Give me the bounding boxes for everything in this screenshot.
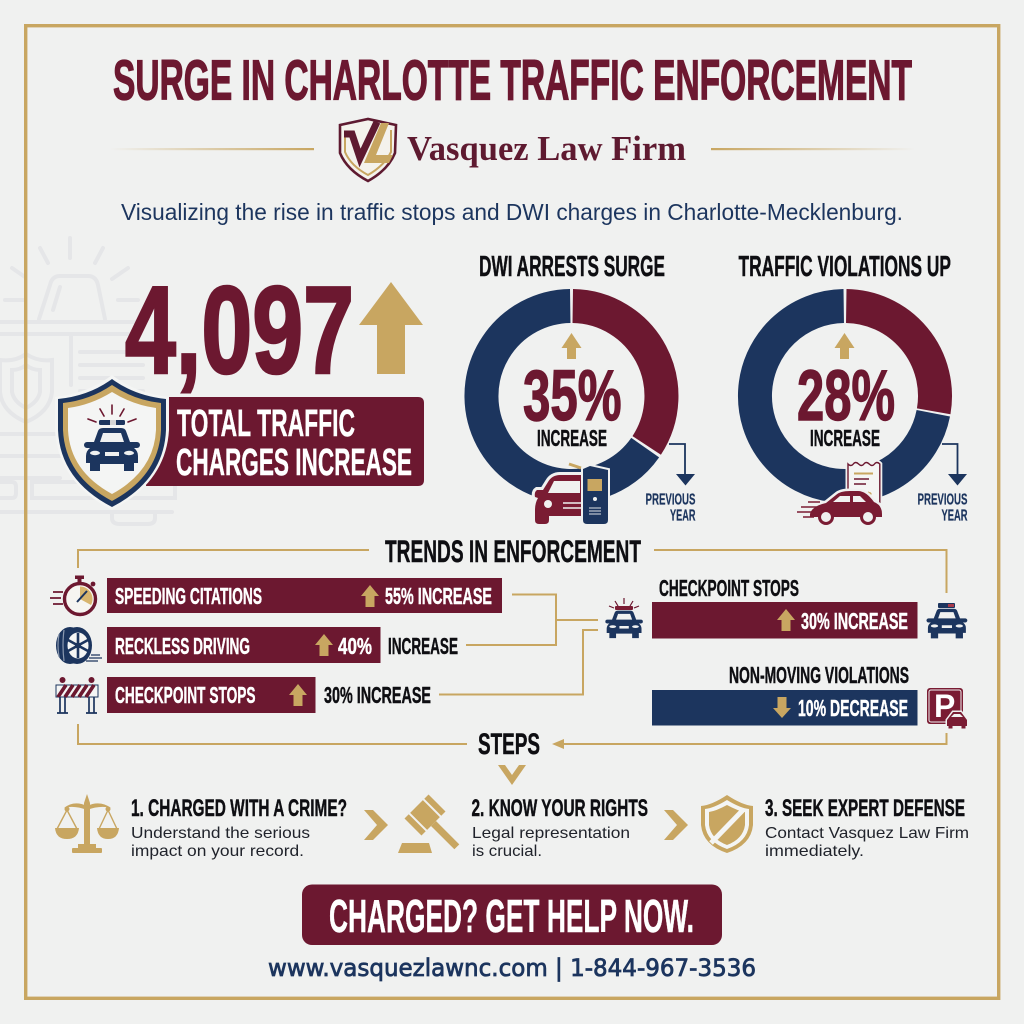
icon: tire xyxy=(56,627,102,664)
label: previous year: YEAR xyxy=(670,508,696,524)
label: previous year xyxy=(918,492,968,524)
connector lines xyxy=(78,550,946,744)
step heading: 1. CHARGED WITH A CRIME? xyxy=(131,795,347,822)
heading: DWI ARRESTS SURGE xyxy=(479,251,665,283)
donut chart xyxy=(755,306,935,486)
arrow: into steps xyxy=(552,739,564,749)
arrow: up xyxy=(359,282,423,374)
row: checkpoint stops right xyxy=(652,575,967,638)
step text xyxy=(472,825,630,860)
call to action button xyxy=(302,884,722,945)
row: non-moving violations xyxy=(652,662,967,728)
row: reckless driving xyxy=(56,627,458,664)
donut chart xyxy=(481,306,661,486)
icon: parking: P xyxy=(934,688,955,724)
icon: scales of justice xyxy=(55,794,119,853)
value: 40% xyxy=(338,633,372,659)
step text xyxy=(765,825,969,860)
label: previous year: PREVIOUS xyxy=(918,492,968,508)
arrow: down xyxy=(773,697,791,718)
label: previous year xyxy=(646,492,696,524)
icon: stopwatch xyxy=(50,576,96,614)
arrow: up xyxy=(361,585,379,607)
arrow: up xyxy=(289,684,307,706)
step 3 xyxy=(701,795,969,860)
panel: DWI arrests donut xyxy=(479,251,696,524)
icon: car and breathalyzer xyxy=(535,464,608,524)
icon: police car centre xyxy=(605,598,643,638)
value: 30% INCREASE xyxy=(324,682,431,708)
label: CHECKPOINT STOPS xyxy=(659,575,799,601)
arrow: steps chevron xyxy=(498,765,526,785)
row: checkpoint stops xyxy=(56,677,431,713)
step text: Contact Vasquez Law Firm xyxy=(765,825,969,842)
row: speeding citations xyxy=(50,576,502,614)
banner text: TOTAL TRAFFIC xyxy=(177,403,355,445)
label: previous year: PREVIOUS xyxy=(646,492,696,508)
icon: defense shield xyxy=(701,795,753,853)
subtitle: Visualizing the rise in traffic stops and DWI charges in Charlotte-Mecklenburg. xyxy=(121,199,903,225)
contact line: www.vasquezlawnc.com | 1-844-967-3536 xyxy=(268,954,756,982)
arrow: previous year xyxy=(669,444,695,486)
arrow: up xyxy=(562,333,582,359)
step text: impact on your record. xyxy=(131,843,304,860)
bar xyxy=(652,690,918,726)
value suffix: INCREASE xyxy=(388,633,458,659)
step 2 xyxy=(398,794,648,860)
bar label: RECKLESS DRIVING xyxy=(115,633,250,659)
bar xyxy=(107,627,380,663)
icon: receipt and speeding car: $ xyxy=(865,489,873,504)
firm name: Vasquez Law Firm xyxy=(407,129,686,168)
step heading: 2. KNOW YOUR RIGHTS xyxy=(472,795,648,822)
label: INCREASE xyxy=(537,425,607,451)
call to action button: CHARGED? GET HELP NOW. xyxy=(329,890,694,942)
panel: traffic violations donut xyxy=(738,251,968,524)
arrow: step 1 to 2 xyxy=(364,810,388,840)
step 1 xyxy=(55,794,347,860)
icon: VL shield logo xyxy=(340,119,396,181)
label: INCREASE xyxy=(810,425,880,451)
arrow: up xyxy=(777,609,795,631)
value: 10% DECREASE xyxy=(798,695,908,721)
arrow: up xyxy=(834,333,854,359)
icon: police shield xyxy=(55,375,169,510)
label: NON-MOVING VIOLATIONS xyxy=(729,662,909,688)
step text: is crucial. xyxy=(472,843,542,860)
icon: receipt and speeding car xyxy=(797,462,882,524)
step text: immediately. xyxy=(765,843,864,860)
value: 55% INCREASE xyxy=(385,583,492,609)
arrow: up xyxy=(315,634,333,656)
logo header xyxy=(110,119,915,181)
panel: total charges stat: CHARGES INCREASE xyxy=(176,442,412,484)
icon: gavel xyxy=(398,794,469,859)
icon: police car right xyxy=(926,603,967,638)
banner xyxy=(146,397,424,486)
heading: steps: STEPS xyxy=(478,728,540,761)
watermark: police siren and report xyxy=(0,238,175,524)
value: 28% xyxy=(797,357,895,436)
bar xyxy=(107,578,502,613)
bar xyxy=(652,602,918,638)
step text: Legal representation xyxy=(472,825,630,842)
bar label: SPEEDING CITATIONS xyxy=(115,583,262,609)
step text xyxy=(131,825,310,860)
icon: parking xyxy=(927,688,967,728)
panel: total charges stat xyxy=(55,262,424,510)
label: previous year: YEAR xyxy=(942,508,968,524)
heading: trends in enforcement: TRENDS IN ENFORCEMENT xyxy=(385,533,641,569)
value: 30% INCREASE xyxy=(801,608,908,634)
step text: Understand the serious xyxy=(131,825,310,842)
big number: 4,097 xyxy=(125,262,354,400)
arrow: previous year xyxy=(942,444,967,486)
arrow: step 2 to 3 xyxy=(664,810,688,840)
value: 35% xyxy=(523,357,622,436)
icon: road barrier xyxy=(56,677,98,713)
bar label: CHECKPOINT STOPS xyxy=(115,682,256,708)
bar xyxy=(107,677,316,713)
